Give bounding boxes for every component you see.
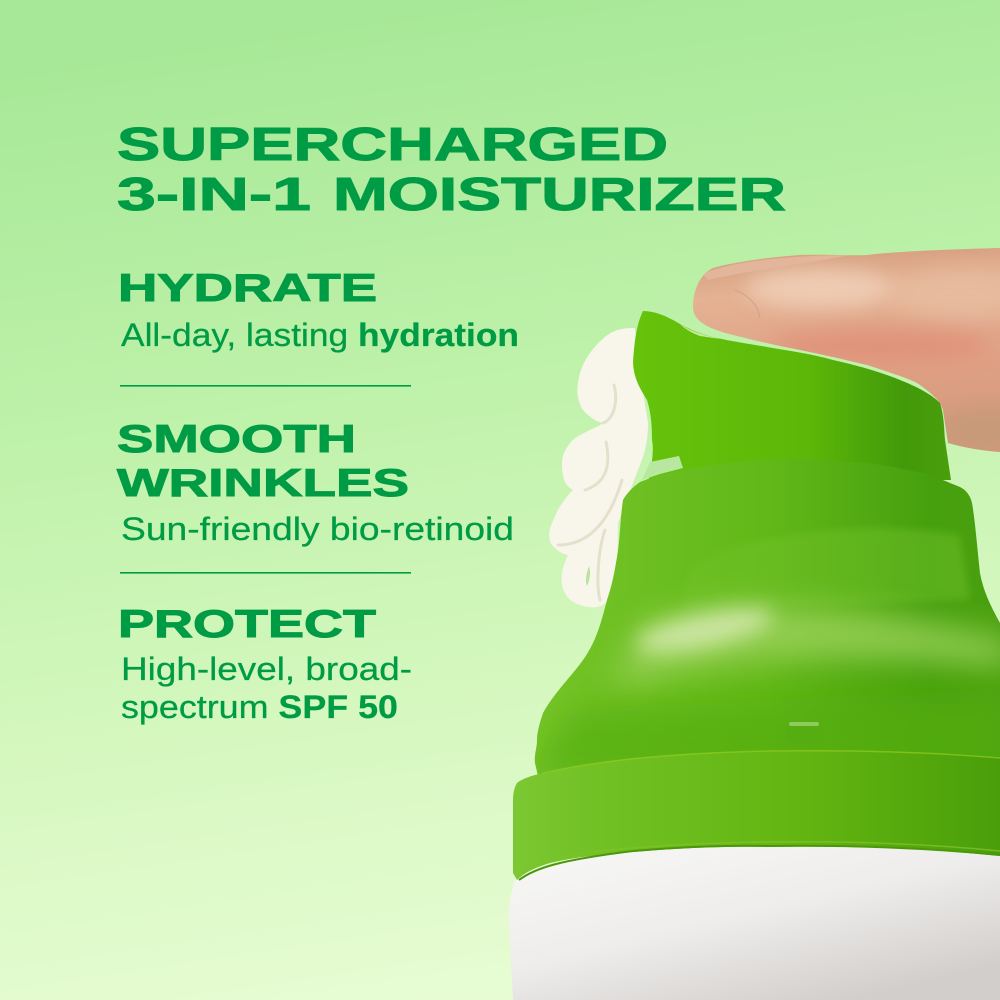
pump head highlight: [680, 324, 720, 339]
benefit: smooth wrinkles: WRINKLES: [117, 462, 409, 505]
title: SUPERCHARGED: [117, 118, 668, 170]
benefit: smooth wrinkles: SMOOTH: [117, 418, 356, 461]
benefit: hydrate: [118, 267, 519, 353]
product: pump bottle: [509, 248, 1000, 1000]
benefit: protect: PROTECT: [118, 603, 377, 646]
pump nozzle: [642, 456, 683, 480]
benefit: smooth wrinkles: [117, 418, 514, 547]
benefit: hydrate: All-day, lasting hydration: [121, 317, 519, 353]
title: 3-IN-1: [117, 168, 311, 220]
collar notch: [786, 721, 824, 744]
pump head: [633, 311, 951, 482]
benefit: protect: spectrum SPF 50: [121, 689, 398, 725]
white bottle: [509, 835, 1000, 1000]
benefit: protect: High-level, broad-: [121, 651, 412, 687]
title: MOISTURIZER: [333, 168, 786, 220]
finger: [693, 248, 1000, 452]
collar: [530, 459, 1000, 780]
benefit: protect: [118, 603, 412, 725]
title: [117, 118, 786, 220]
benefit: smooth wrinkles: Sun-friendly bio-retinoid: [121, 511, 514, 547]
cream: [549, 328, 648, 607]
benefit: hydrate: HYDRATE: [118, 267, 377, 310]
base ring: [513, 750, 1000, 880]
